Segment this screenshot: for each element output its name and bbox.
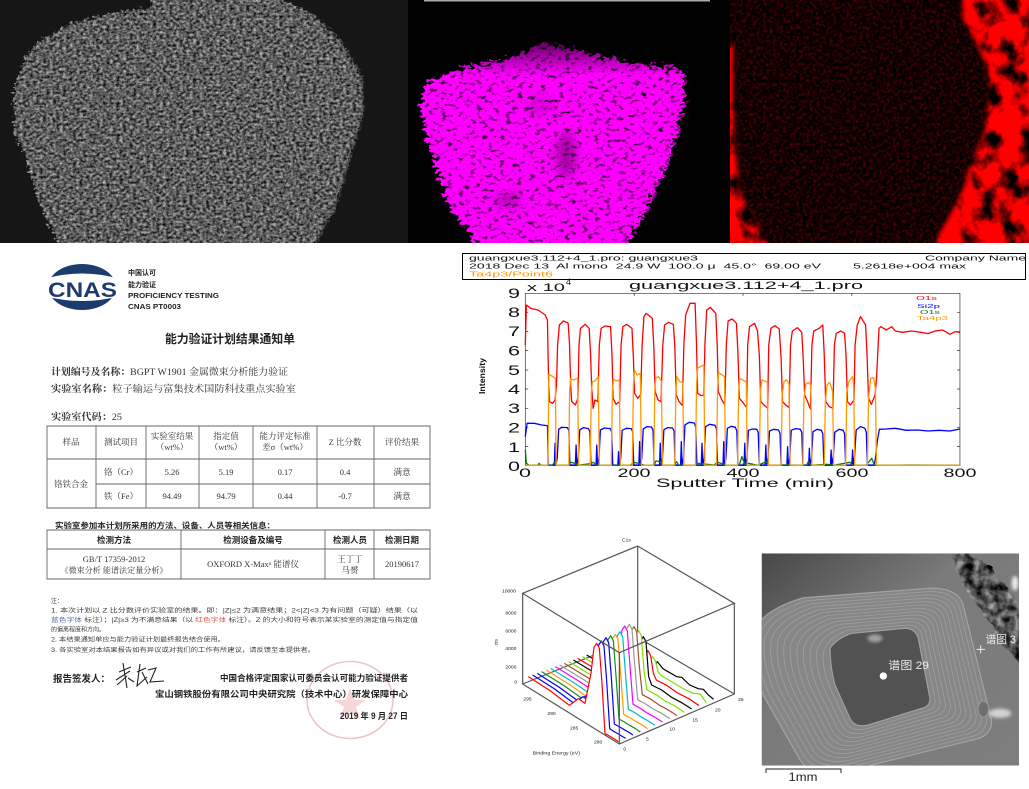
- chart title: guangxue3.112+4_1.pro: [629, 280, 863, 292]
- label: spectrum 3: 谱图 3: [986, 633, 1016, 646]
- plan info lines: [51, 366, 297, 423]
- results table: 0.44: [278, 491, 293, 501]
- energy axis labels: 280: [594, 739, 603, 745]
- intensity axis labels: 2000: [505, 664, 517, 670]
- results table: （wt%）: [156, 442, 188, 452]
- time axis labels: [623, 697, 744, 753]
- issuing bodies: 2019 年 9 月 27 日: [340, 710, 408, 721]
- results table: 能力评定标准: [259, 431, 311, 441]
- energy axis labels: 290: [547, 711, 556, 717]
- x axis labels: 400: [726, 466, 760, 480]
- logo caption text: 能力验证: [128, 280, 156, 289]
- icon: CNAS logo: [44, 264, 120, 310]
- methods table: GB/T 17359-2012: [83, 554, 145, 564]
- methods table: 20190617: [385, 559, 419, 569]
- results table: 94.49: [162, 491, 182, 501]
- methods table: 马赟: [341, 565, 359, 575]
- chart legend: [916, 296, 948, 322]
- results table: 铬（Cr）: [104, 467, 138, 477]
- icon: CNAS logo: CNAS: [48, 279, 117, 302]
- results table: 满意: [393, 491, 411, 501]
- time axis labels: 20: [715, 708, 721, 714]
- y axis labels: 0: [508, 458, 520, 474]
- y axis labels: x 10: [527, 282, 565, 294]
- plan info lines: 实验室名称： 粒子输运与富集技术国防科技重点实验室: [51, 383, 297, 395]
- chart legend: O1s: [920, 310, 940, 316]
- scale bar: 1mm: [788, 772, 818, 784]
- point marker: spectrum 29: [880, 672, 887, 680]
- y axis labels: 5: [508, 362, 520, 378]
- defect bump on ring: [978, 701, 989, 717]
- stamp: [307, 662, 393, 738]
- methods table: 能谱仪: [271, 559, 299, 569]
- intensity axis labels: 4000: [505, 646, 517, 652]
- methods table: [47, 530, 430, 579]
- logo caption text: 中国认可: [128, 268, 156, 277]
- panel: XPS depth profile header box: Ta4p3/Point6: [469, 272, 553, 278]
- methods table heading: 实验室参加本计划所采用的方法、设备、人员等相关信息：: [55, 520, 275, 530]
- results table: 实验室结果: [151, 431, 194, 441]
- bright speck on square edge: [868, 634, 882, 642]
- rough debris upper right: [952, 553, 1022, 665]
- footnotes: 3. 各实验室对本结果报告如有异议或对我们的工作有所建议，请反馈至本提供者。: [51, 646, 315, 654]
- panel: XPS depth profile header box: guangxue3.112+4_1.pro: guangxue3: [469, 256, 698, 262]
- time axis labels: 15: [692, 718, 698, 724]
- y axis labels: 9: [508, 285, 520, 301]
- y axis title: Intensity: [478, 357, 487, 394]
- logo caption text: CNAS PT0003: [128, 302, 181, 311]
- y axis labels: [508, 277, 571, 474]
- results table: 铁（Fe）: [104, 491, 138, 501]
- chart legend: Ta4p3: [917, 316, 948, 322]
- chart: 3D C1s spectra waterfall: [493, 537, 744, 757]
- results table: 满意: [393, 467, 411, 477]
- methods table: 检测方法: [97, 535, 131, 545]
- results table: -0.7: [338, 491, 352, 501]
- methods table: 王丁丁: [337, 554, 363, 564]
- concentric rings: [751, 588, 992, 773]
- y axis labels: 4: [508, 381, 520, 397]
- label: spectrum 29: 谱图 29: [888, 659, 929, 672]
- panel: SEM image of ring pattern: [751, 553, 1022, 773]
- results table: 测试项目: [104, 437, 138, 447]
- panel: XPS depth profile header box: 5.2618e+004 max: [853, 264, 967, 270]
- panel: XPS depth profile header box: 2018 Dec 13 Al mono 24.9 W 100.0 μ 45.0° 69.00 eV: [469, 262, 822, 270]
- results table: 指定值: [213, 431, 239, 441]
- energy axis labels: 285: [570, 725, 579, 731]
- footnotes: 的偏离程度和方向。: [51, 626, 105, 634]
- results table: 5.26: [165, 467, 179, 477]
- panel: CNAS proficiency notice document: [44, 264, 430, 738]
- issuing bodies: 中国合格评定国家认可委员会认可能力验证提供者: [220, 672, 408, 683]
- x axis labels: 800: [944, 466, 977, 480]
- results table: 94.79: [216, 491, 236, 501]
- white glint on debris: [1012, 576, 1018, 591]
- methods table: 检测设备及编号: [223, 535, 283, 545]
- footnotes: 蓝色字体 标注）；|Z|≥3 为不满意结果（以 红色字体 标注）。Z 的大小和符号表示某实验室的测定值与指定值: [51, 616, 418, 624]
- methods table: 检测日期: [385, 535, 419, 545]
- energy axis labels: 295: [523, 697, 532, 703]
- y axis labels: 1: [508, 439, 520, 455]
- panel: red element map: [722, 0, 1029, 250]
- y axis labels: 3: [508, 400, 520, 416]
- time axis labels: 10: [669, 727, 675, 733]
- y axis labels: 2: [508, 420, 520, 436]
- panel: SEM micrograph of particle: [0, 0, 408, 250]
- results table: 0.4: [340, 467, 351, 477]
- results table: 评价结果: [385, 437, 419, 447]
- y axis labels: 6: [508, 342, 520, 358]
- x axis labels: [519, 466, 977, 480]
- panel: XPS depth profile header box: [462, 254, 1026, 280]
- x axis labels: 0: [519, 466, 532, 480]
- 3D box front edges: [523, 546, 734, 744]
- bright glow lower right: [989, 709, 1011, 718]
- trace: Si2p blue: [525, 422, 960, 465]
- methods table: n: [269, 562, 272, 567]
- time axis labels: 25: [738, 697, 744, 703]
- issuing bodies: 宝山钢铁股份有限公司中央研究院（技术中心）研发保障中心: [155, 688, 408, 699]
- results table: 样品: [62, 437, 80, 447]
- results table: Z 比分数: [329, 437, 362, 447]
- intensity axis labels: C1s: [622, 537, 631, 543]
- point marker: spectrum 3x cross: [977, 645, 985, 653]
- footnotes: 注：: [51, 597, 63, 605]
- methods table: OXFORD X-Max: [207, 559, 269, 569]
- results table: 铬铁合金: [54, 479, 88, 489]
- energy axis labels: [523, 697, 603, 757]
- methods table: 《微束分析 能谱法定量分析》: [60, 565, 168, 575]
- chart legend: O1s: [916, 296, 938, 302]
- signature: [116, 663, 164, 688]
- chart: sputter depth profile: [478, 277, 977, 490]
- results table: （wt%）: [210, 442, 242, 452]
- 3D box back edges: [523, 546, 734, 694]
- time axis labels: 0: [623, 747, 626, 753]
- results table: 5.19: [219, 467, 233, 477]
- intensity axis labels: 0: [514, 680, 517, 686]
- trace: Ta4p3 orange: [525, 365, 960, 465]
- plan info lines: 实验室代码： 25: [51, 411, 122, 423]
- x axis labels: 600: [836, 466, 869, 480]
- spectra curves: [528, 624, 714, 742]
- issuing bodies: [155, 672, 408, 721]
- footnotes: 1. 本次计划以 Z 比分数评价实验室的结果。即：|Z|≤2 为满意结果；2<|Z|<3 为有问题（可疑）结果（以: [51, 606, 418, 614]
- results table: 差σ（wt%）: [262, 442, 308, 452]
- results table: [47, 426, 430, 508]
- methods table: 检测人员: [333, 535, 367, 545]
- y axis labels: 4: [566, 277, 571, 287]
- y axis labels: 8: [508, 304, 520, 320]
- results table: 0.17: [278, 467, 292, 477]
- chart legend: Si2p: [917, 304, 940, 310]
- trace: O1s green: [525, 450, 960, 465]
- intensity axis labels: 8000: [505, 610, 517, 616]
- intensity axis labels: [493, 537, 631, 686]
- intensity axis labels: 10000: [502, 588, 516, 594]
- panel: XPS depth profile header box: Company Name: [925, 256, 1026, 262]
- intensity axis labels: 6000: [505, 628, 517, 634]
- x axis title: Sputter Time (min): [656, 476, 834, 490]
- time axis labels: 5: [646, 737, 649, 743]
- x axis labels: 200: [618, 466, 651, 480]
- logo caption text: [128, 268, 219, 311]
- y axis labels: 7: [508, 323, 520, 339]
- footnotes: 2. 本结果通知单应与能力验证计划最终报告结合使用。: [51, 636, 225, 644]
- footnotes: [51, 597, 418, 654]
- intensity axis labels: cts: [493, 638, 499, 645]
- plan info lines: 计划编号及名称： BGPT W1901 金属微束分析能力验证: [51, 366, 289, 378]
- plot traces: [525, 293, 960, 466]
- document title: 能力验证计划结果通知单: [165, 331, 295, 346]
- signer label: 报告签发人：: [53, 673, 110, 685]
- central dark square: [830, 628, 930, 726]
- trace: O1s red: [525, 303, 960, 409]
- energy axis labels: Binding Energy (eV): [533, 751, 580, 757]
- panel: magenta element map: [408, 0, 730, 250]
- scale bar: [766, 769, 841, 784]
- logo caption text: PROFICIENCY TESTING: [128, 291, 219, 300]
